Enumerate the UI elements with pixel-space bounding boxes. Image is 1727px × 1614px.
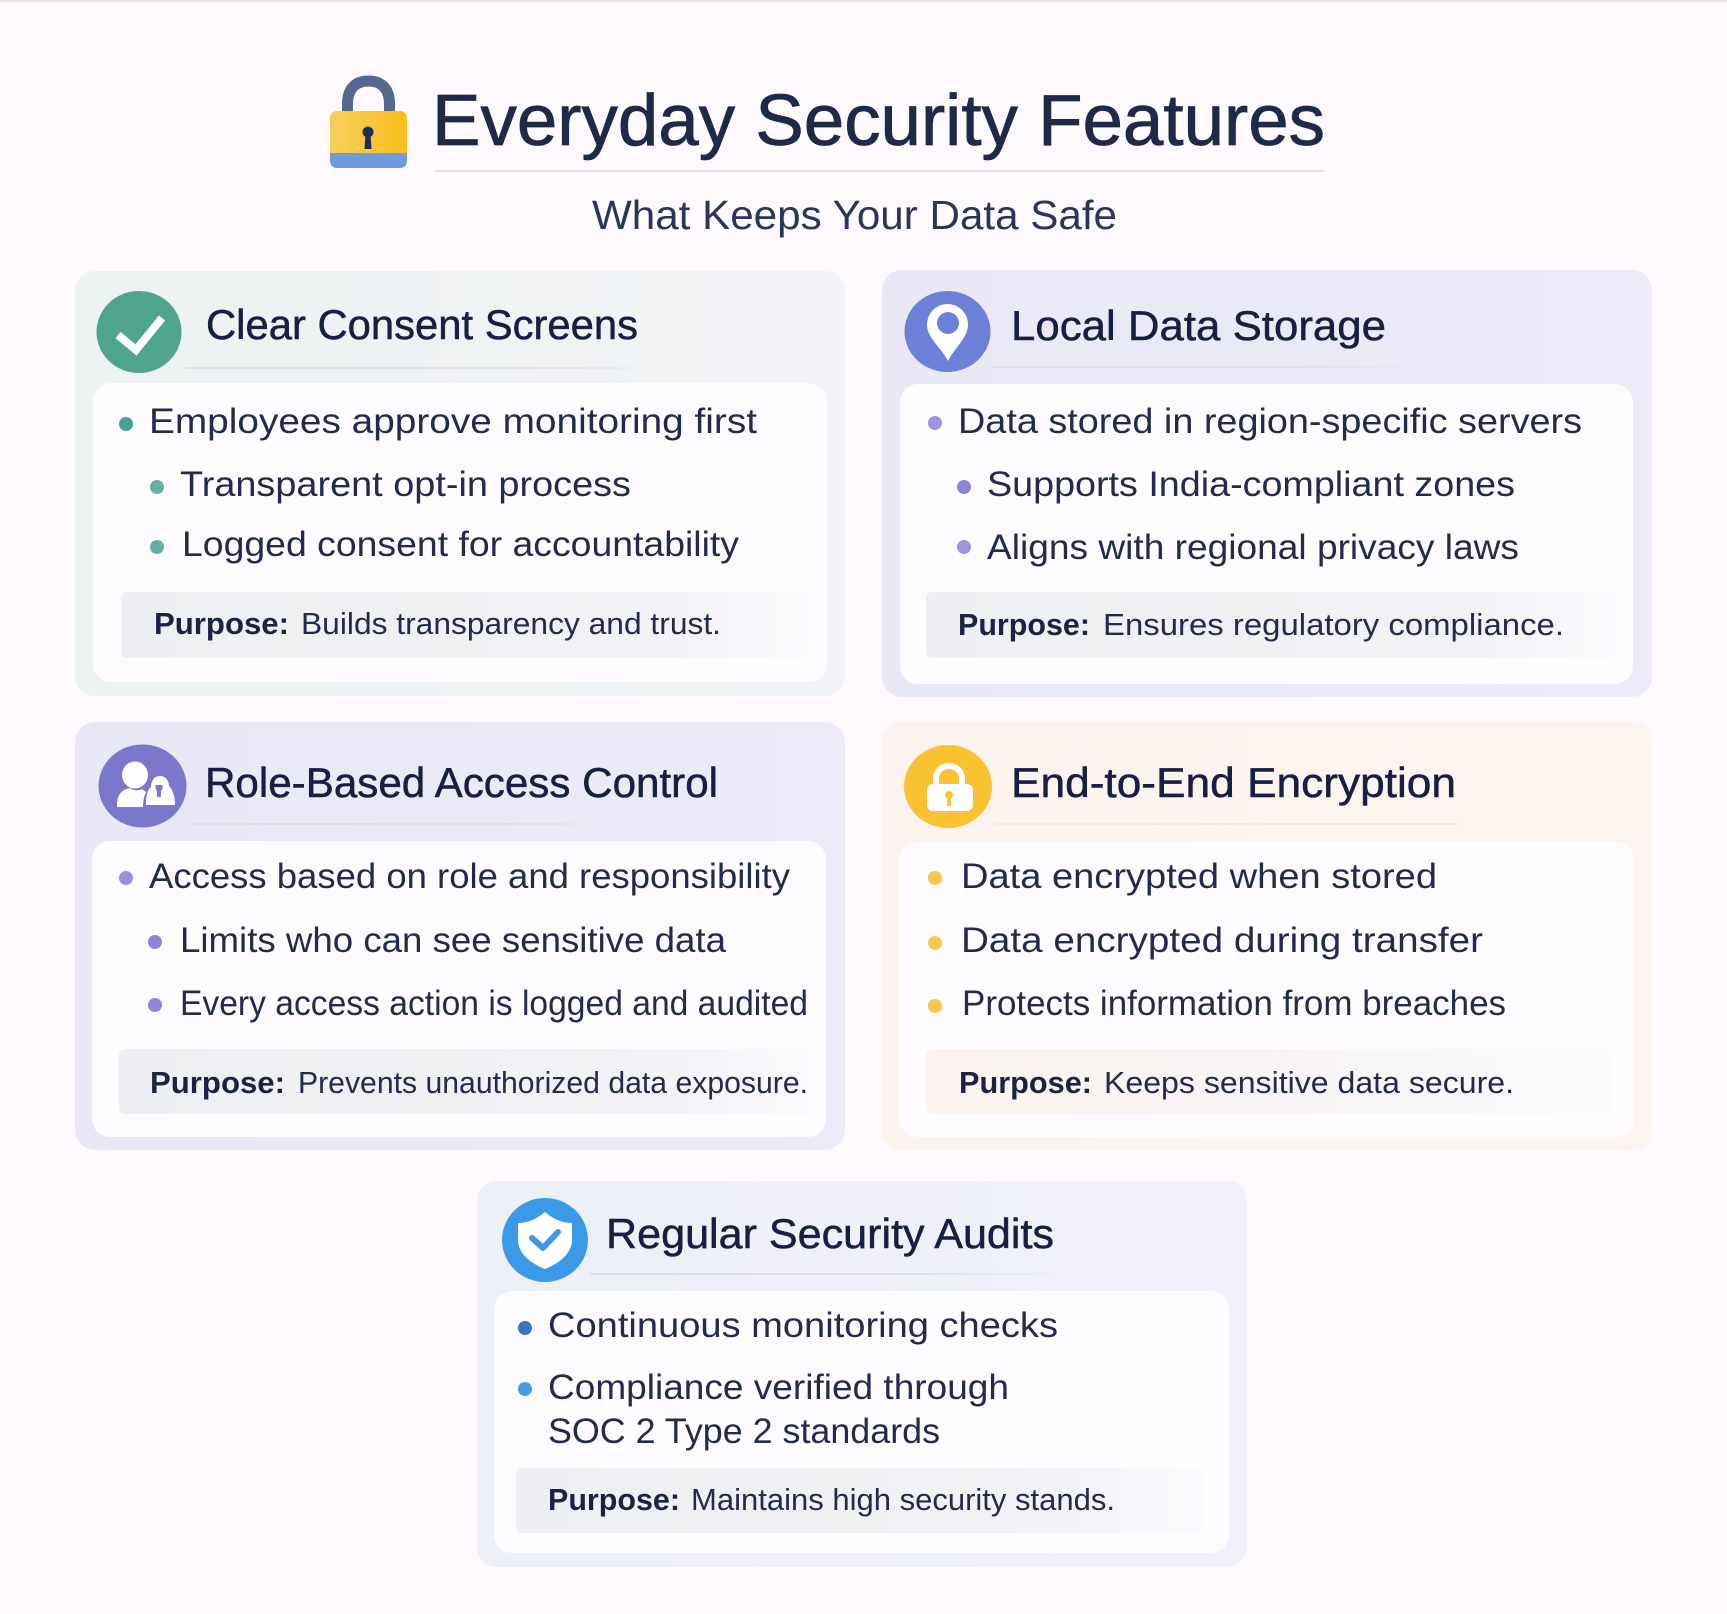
bullet list: [119, 402, 757, 564]
bullet list: Transparent opt-in process: [180, 465, 631, 504]
bullet list: Aligns with regional privacy laws: [987, 528, 1519, 567]
bullet list: Logged consent for accountability: [182, 525, 740, 564]
icon: green check: [96, 291, 182, 373]
purpose band: [516, 1468, 1205, 1533]
bullet list: SOC 2 Type 2 standards: [548, 1412, 940, 1451]
bullet list: Data stored in region-specific servers: [958, 402, 1582, 441]
bullet list: Protects information from breaches: [962, 984, 1506, 1023]
heading: role-based access control: Role-Based Access Control: [205, 759, 718, 806]
purpose band: Ensures regulatory compliance.: [1103, 607, 1564, 642]
purpose band: Purpose:: [959, 1065, 1092, 1100]
purpose band: Maintains high security stands.: [691, 1482, 1115, 1517]
icon: white lock on yellow: [904, 745, 992, 828]
heading: regular security audits: Regular Security Audits: [606, 1210, 1054, 1257]
bullet list: Limits who can see sensitive data: [180, 921, 727, 960]
bullet list: [518, 1306, 1058, 1451]
card body: [494, 1291, 1229, 1553]
bullet list: Compliance verified through: [548, 1368, 1009, 1407]
bullet list: Every access action is logged and audited: [180, 984, 808, 1023]
icon: padlock: [330, 81, 407, 168]
card body: [900, 384, 1633, 684]
card body: [899, 842, 1634, 1137]
heading: end-to-end encryption: End-to-End Encryption: [1011, 759, 1456, 806]
bullet list: [119, 857, 808, 1023]
card body: [93, 383, 827, 682]
purpose band: Keeps sensitive data secure.: [1104, 1065, 1514, 1100]
purpose band: [119, 1049, 814, 1114]
icon: shield with check: [502, 1198, 588, 1282]
heading: local data storage: Local Data Storage: [1011, 302, 1386, 349]
bullet list: Data encrypted during transfer: [961, 921, 1483, 960]
subtitle: What Keeps Your Data Safe: [592, 192, 1117, 238]
bullet list: [928, 857, 1506, 1023]
bullet list: Employees approve monitoring first: [149, 402, 757, 441]
purpose band: Purpose:: [150, 1065, 285, 1100]
heading: clear consent screens: Clear Consent Screens: [206, 301, 638, 348]
panel: end-to-end encryption: [882, 722, 1652, 1150]
icon: user with lock: [98, 744, 186, 828]
bullet list: Continuous monitoring checks: [548, 1306, 1058, 1345]
bullet list: [928, 402, 1582, 567]
bullet list: Data encrypted when stored: [961, 857, 1437, 896]
title: Everyday Security Features: [432, 81, 1325, 161]
panel: local data storage: [882, 270, 1652, 697]
icon: location pin: [904, 291, 990, 372]
panel: role-based access control: [75, 722, 845, 1150]
purpose band: [926, 1049, 1611, 1114]
panel: regular security audits: [477, 1181, 1247, 1567]
bullet list: Supports India-compliant zones: [987, 465, 1515, 504]
bullet list: Access based on role and responsibility: [149, 857, 791, 896]
card body: [92, 841, 826, 1137]
purpose band: [121, 592, 810, 658]
purpose band: Prevents unauthorized data exposure.: [298, 1065, 808, 1100]
panel: clear consent screens: [75, 271, 845, 696]
purpose band: Builds transparency and trust.: [301, 606, 721, 641]
purpose band: Purpose:: [958, 607, 1090, 642]
purpose band: Purpose:: [154, 606, 289, 641]
purpose band: Purpose:: [548, 1482, 680, 1517]
purpose band: [926, 592, 1617, 658]
